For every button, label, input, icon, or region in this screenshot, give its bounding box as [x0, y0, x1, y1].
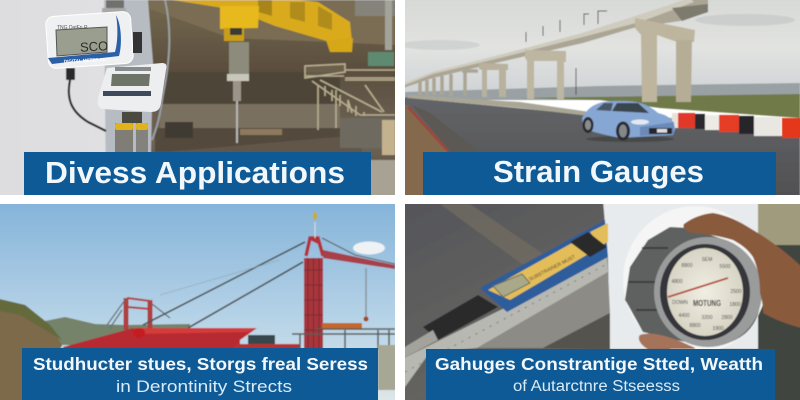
left embankment [0, 298, 62, 400]
gravel verge [405, 104, 448, 195]
dial scale: 5500 [719, 264, 731, 270]
dial scale: 4400 [678, 313, 690, 319]
steel ruler [400, 257, 608, 394]
vegetation [520, 94, 800, 118]
banner: strain gauges [423, 152, 776, 195]
far piers [420, 71, 478, 96]
banner line one: Gahuges Constrantige Stted, Weatth [435, 354, 763, 374]
metal plate [477, 272, 610, 348]
right background [755, 200, 800, 400]
hydraulic jack [227, 42, 249, 143]
middle pier [525, 50, 566, 99]
digital meter two [98, 63, 166, 152]
road [400, 97, 800, 200]
red barge deck [63, 328, 300, 350]
panel: gauges [400, 200, 800, 400]
hand [639, 213, 800, 349]
needle [668, 278, 728, 297]
banner: structural stress [22, 348, 378, 400]
yellow gantry [172, 0, 353, 52]
far crane [107, 298, 170, 330]
small pier [479, 63, 508, 97]
connector posts [115, 112, 148, 152]
hill background [40, 317, 190, 345]
dial scale: 4800 [671, 279, 683, 285]
dial scale: 3200 [701, 315, 713, 321]
dial scale: 1900 [712, 326, 724, 332]
pipe fitting [106, 0, 124, 8]
photo: bridge construction [0, 200, 400, 400]
meter reading: SCO [80, 38, 109, 55]
banner: diverse applications [24, 152, 371, 195]
dial scale: 8800 [689, 323, 701, 329]
banner line two: in Derontinity Strects [116, 378, 292, 396]
dial scale [671, 257, 742, 332]
panel: structural stress [0, 200, 400, 400]
photo: viaduct and road [400, 0, 800, 200]
banner line one: Studhucter stues, Storgs freal Seress [33, 354, 368, 374]
dial scale: 2500 [730, 289, 742, 295]
panel: diverse applications [0, 0, 400, 200]
meter label: TNG DatFn R [57, 25, 88, 31]
banner: strain gauges: Strain Gauges [493, 154, 704, 189]
banner line two: of Autarctnre Stseesss [513, 378, 680, 395]
photo: strain device and dial gauge [400, 200, 800, 400]
blue car [582, 101, 675, 142]
dial gauge [625, 227, 762, 347]
banner: diverse applications: Divess Applications [45, 155, 345, 190]
device label: SUBSTRAINER MUST [528, 254, 576, 283]
lamp posts [526, 11, 607, 95]
elevated viaduct [400, 0, 708, 102]
cable stays [143, 242, 305, 328]
dial scale: 8800 [681, 263, 693, 269]
tower crane [304, 212, 395, 350]
cloud [353, 242, 385, 254]
traffic barriers [672, 113, 800, 138]
panel: strain gauges [400, 0, 800, 200]
scaffold stairs [305, 64, 395, 130]
dock framework [292, 323, 400, 390]
dial scale: DOWN [672, 300, 688, 306]
distant horizon [405, 83, 800, 100]
handheld strain device [400, 220, 608, 360]
construction site background [148, 0, 400, 200]
meter model: DIGITAL METER AKT [64, 57, 109, 64]
dial scale: 1800 [729, 302, 741, 308]
digital meter one [45, 11, 142, 69]
cable [69, 68, 106, 131]
wall column [104, 0, 154, 152]
dial label: MOTUNG [693, 299, 721, 308]
dial scale: SEM [702, 257, 712, 263]
photo: gauges on a construction site [0, 0, 400, 200]
dial scale: 2800 [721, 315, 733, 321]
banner: gauges [426, 349, 775, 400]
white enclosure [603, 200, 758, 349]
large pier [635, 18, 695, 102]
